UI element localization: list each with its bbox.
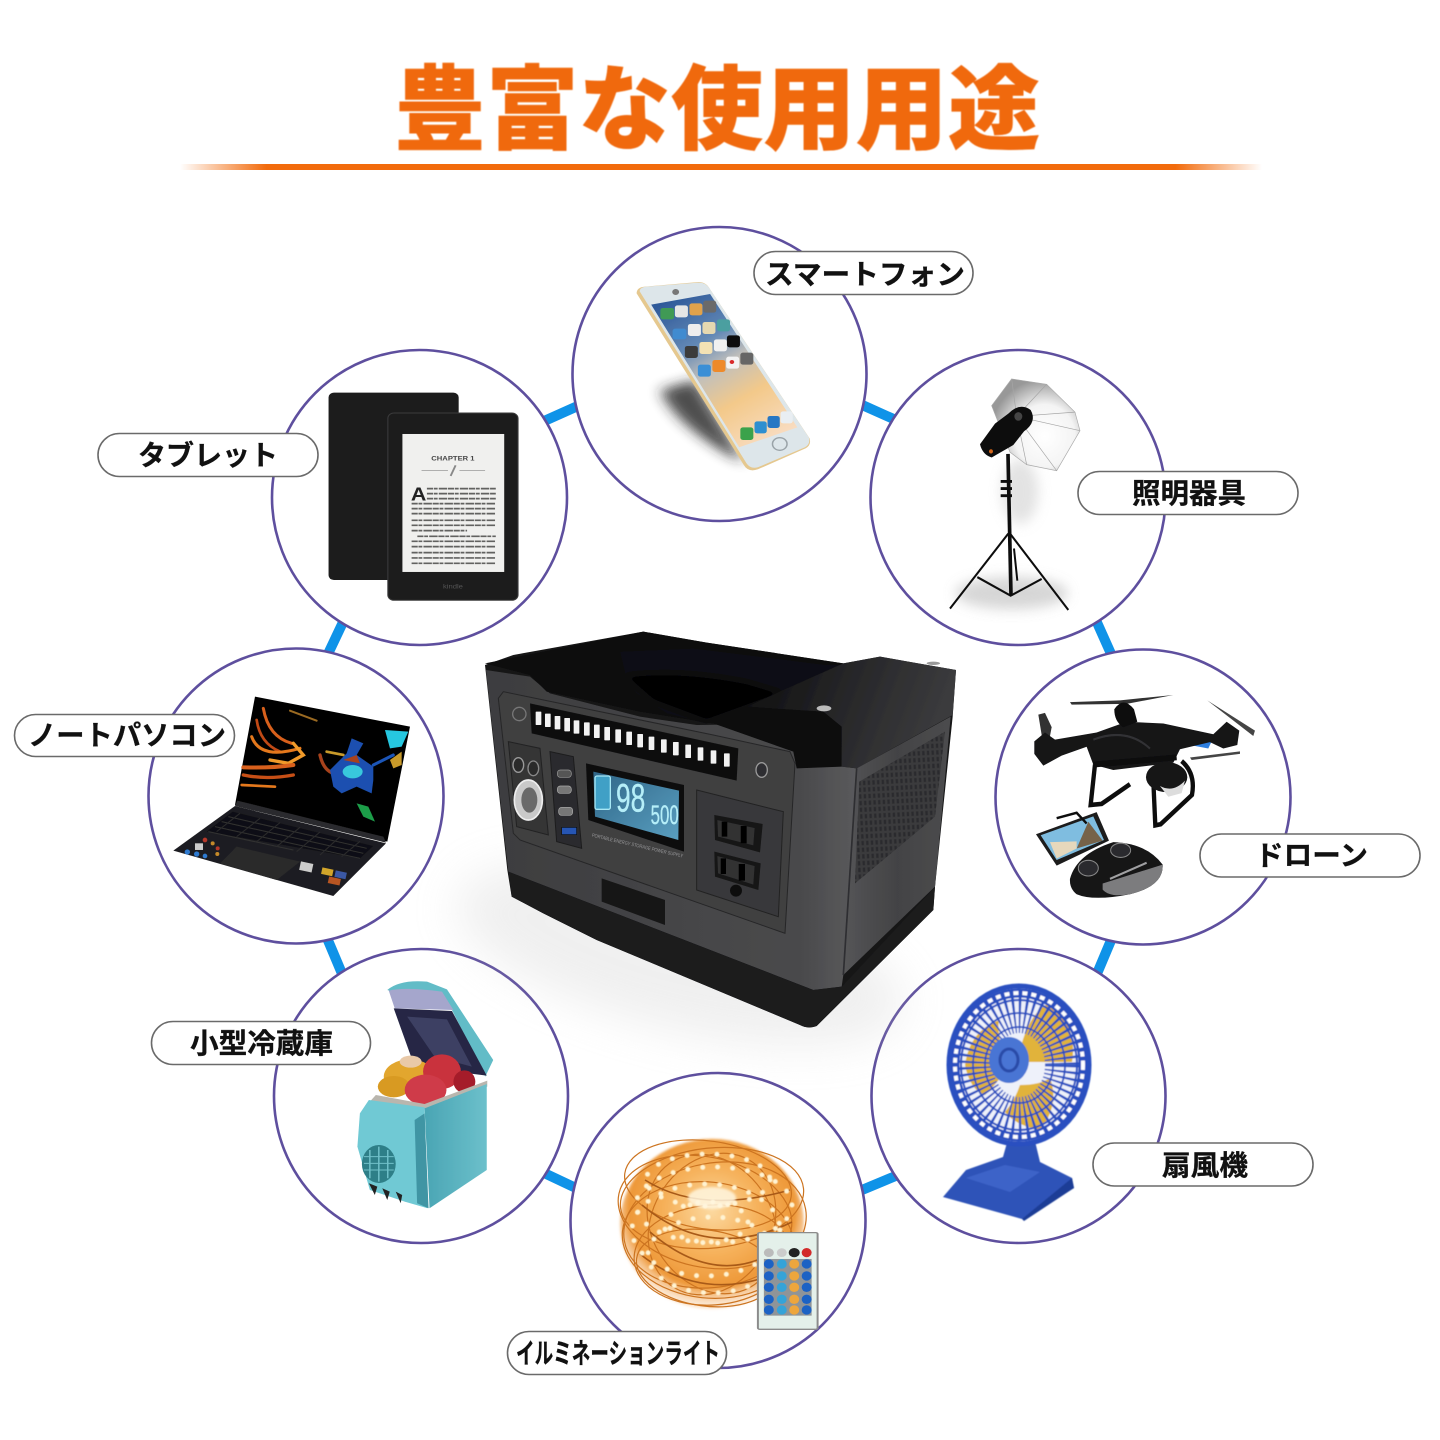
icon: drone and controller — [1034, 695, 1255, 898]
panel: illumination — [570, 1073, 866, 1368]
front body — [486, 670, 857, 990]
label: drone — [1200, 834, 1420, 877]
bottom window — [602, 878, 665, 925]
label: illumination: イルミネーションライト — [516, 1338, 720, 1369]
title: 豊富な使用用途 — [394, 60, 1040, 162]
12V button — [756, 763, 767, 777]
DC panel — [508, 742, 548, 835]
label: lighting — [1078, 472, 1298, 514]
icon: e-reader tablets: A — [411, 485, 426, 505]
AC panel — [697, 790, 783, 917]
black lid — [485, 632, 843, 768]
icon: laptop — [173, 697, 410, 896]
icon: e-reader tablets: CHAPTER 1 — [431, 455, 475, 463]
title underline — [180, 164, 1262, 170]
lid handle — [620, 648, 843, 723]
label: smartphone: スマートフォン — [765, 259, 965, 290]
label: smartphone — [754, 252, 973, 294]
icon: e-reader tablets: kindle — [443, 583, 463, 590]
icon: remote control — [758, 1233, 818, 1329]
panel: smartphone — [572, 227, 866, 521]
icon: mini fridge — [357, 981, 493, 1208]
right side — [843, 717, 951, 975]
central power station: 500 — [651, 800, 679, 830]
right top — [747, 657, 956, 768]
panel: lighting — [870, 350, 1166, 645]
connectors — [327, 404, 1112, 1190]
soft shadow under power station — [439, 827, 921, 1083]
panel: laptop — [148, 648, 444, 944]
bottom bands — [508, 872, 935, 1027]
central power station: PORTABLE ENERGY STORAGE POWER SUPPLY — [591, 833, 684, 860]
icon: desk fan — [943, 984, 1091, 1221]
label: laptop — [14, 714, 234, 756]
label: fan — [1093, 1143, 1313, 1186]
label: tablet: タブレット — [138, 439, 278, 471]
icon: smartphone — [637, 282, 810, 470]
power button — [513, 707, 526, 721]
central power station: 98 — [616, 777, 645, 821]
central power station — [485, 632, 956, 1027]
LCD — [586, 763, 684, 852]
LED bar — [530, 703, 738, 781]
vent — [855, 732, 945, 883]
icon: string lights — [607, 1129, 816, 1319]
label: drone: ドローン — [1255, 840, 1368, 871]
panel: fan — [872, 949, 1166, 1243]
label: tablet — [98, 434, 318, 476]
panel: drone — [996, 650, 1290, 944]
label: laptop: ノートパソコン — [28, 720, 226, 751]
label: lighting: 照明器具 — [1132, 478, 1246, 509]
main panel outline — [498, 692, 795, 933]
label: illumination — [508, 1332, 726, 1374]
icon: e-reader tablets — [329, 393, 518, 600]
panel: mini fridge — [274, 949, 568, 1243]
panel: tablet — [272, 350, 567, 645]
screw — [817, 705, 831, 711]
icon: studio light — [950, 379, 1080, 610]
USB panel — [550, 752, 582, 848]
silhouette — [485, 632, 956, 1027]
label: fan: 扇風機 — [1162, 1150, 1248, 1181]
label: mini fridge: 小型冷蔵庫 — [190, 1028, 333, 1059]
label: mini fridge — [152, 1022, 370, 1064]
